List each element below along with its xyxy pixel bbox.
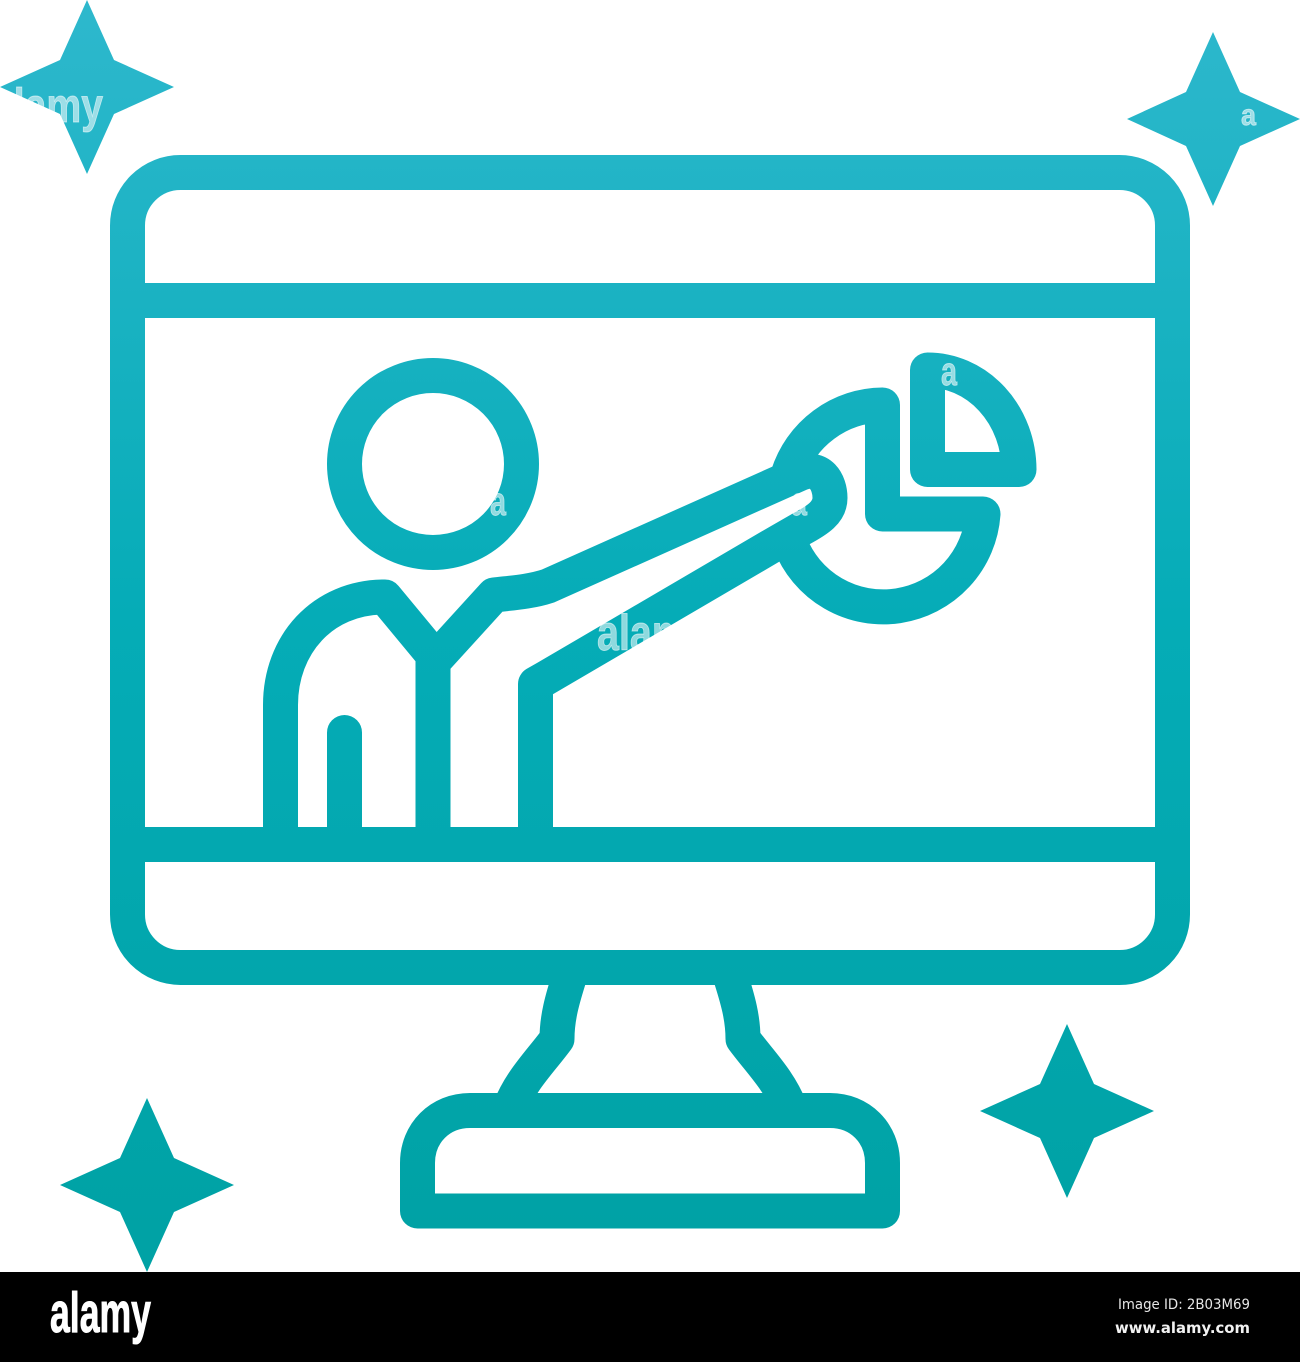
icon: computer monitor <box>128 172 1172 1211</box>
watermark: head: a <box>490 480 507 524</box>
presenter left side and collar <box>280 597 433 835</box>
watermark: pie slice: a <box>941 350 958 394</box>
footer logo: alamy <box>50 1281 151 1345</box>
monitor frame <box>128 172 1172 968</box>
watermark: hand: a <box>791 480 808 524</box>
footer website: www.alamy.com <box>1115 1319 1250 1337</box>
chart: pie chart <box>788 370 1019 607</box>
star: bottom right <box>980 1024 1154 1198</box>
presenter inner sleeve line <box>327 732 362 835</box>
star: bottom left <box>60 1098 234 1272</box>
footer background <box>0 1272 1300 1362</box>
monitor stand neck <box>510 975 790 1108</box>
watermarks <box>0 80 1256 661</box>
monitor stand base <box>418 1110 882 1211</box>
presenter head <box>344 376 522 552</box>
footer bar <box>0 1272 1300 1362</box>
watermark: shoulder: a <box>341 610 358 654</box>
monitor bottom bar divider <box>128 827 1172 862</box>
icon: presenter <box>280 376 830 835</box>
pie body with cut-out wedge <box>788 405 983 607</box>
pie detached slice <box>928 370 1019 470</box>
footer image id: Image ID: 2B03M69 <box>1118 1297 1250 1313</box>
star: top right <box>1127 32 1300 206</box>
watermark: star top right: a <box>1241 99 1256 132</box>
star: top left <box>0 0 174 174</box>
monitor title bar divider <box>128 283 1172 318</box>
watermark: arm: alam <box>597 605 687 661</box>
presenter raised arm <box>433 471 830 835</box>
